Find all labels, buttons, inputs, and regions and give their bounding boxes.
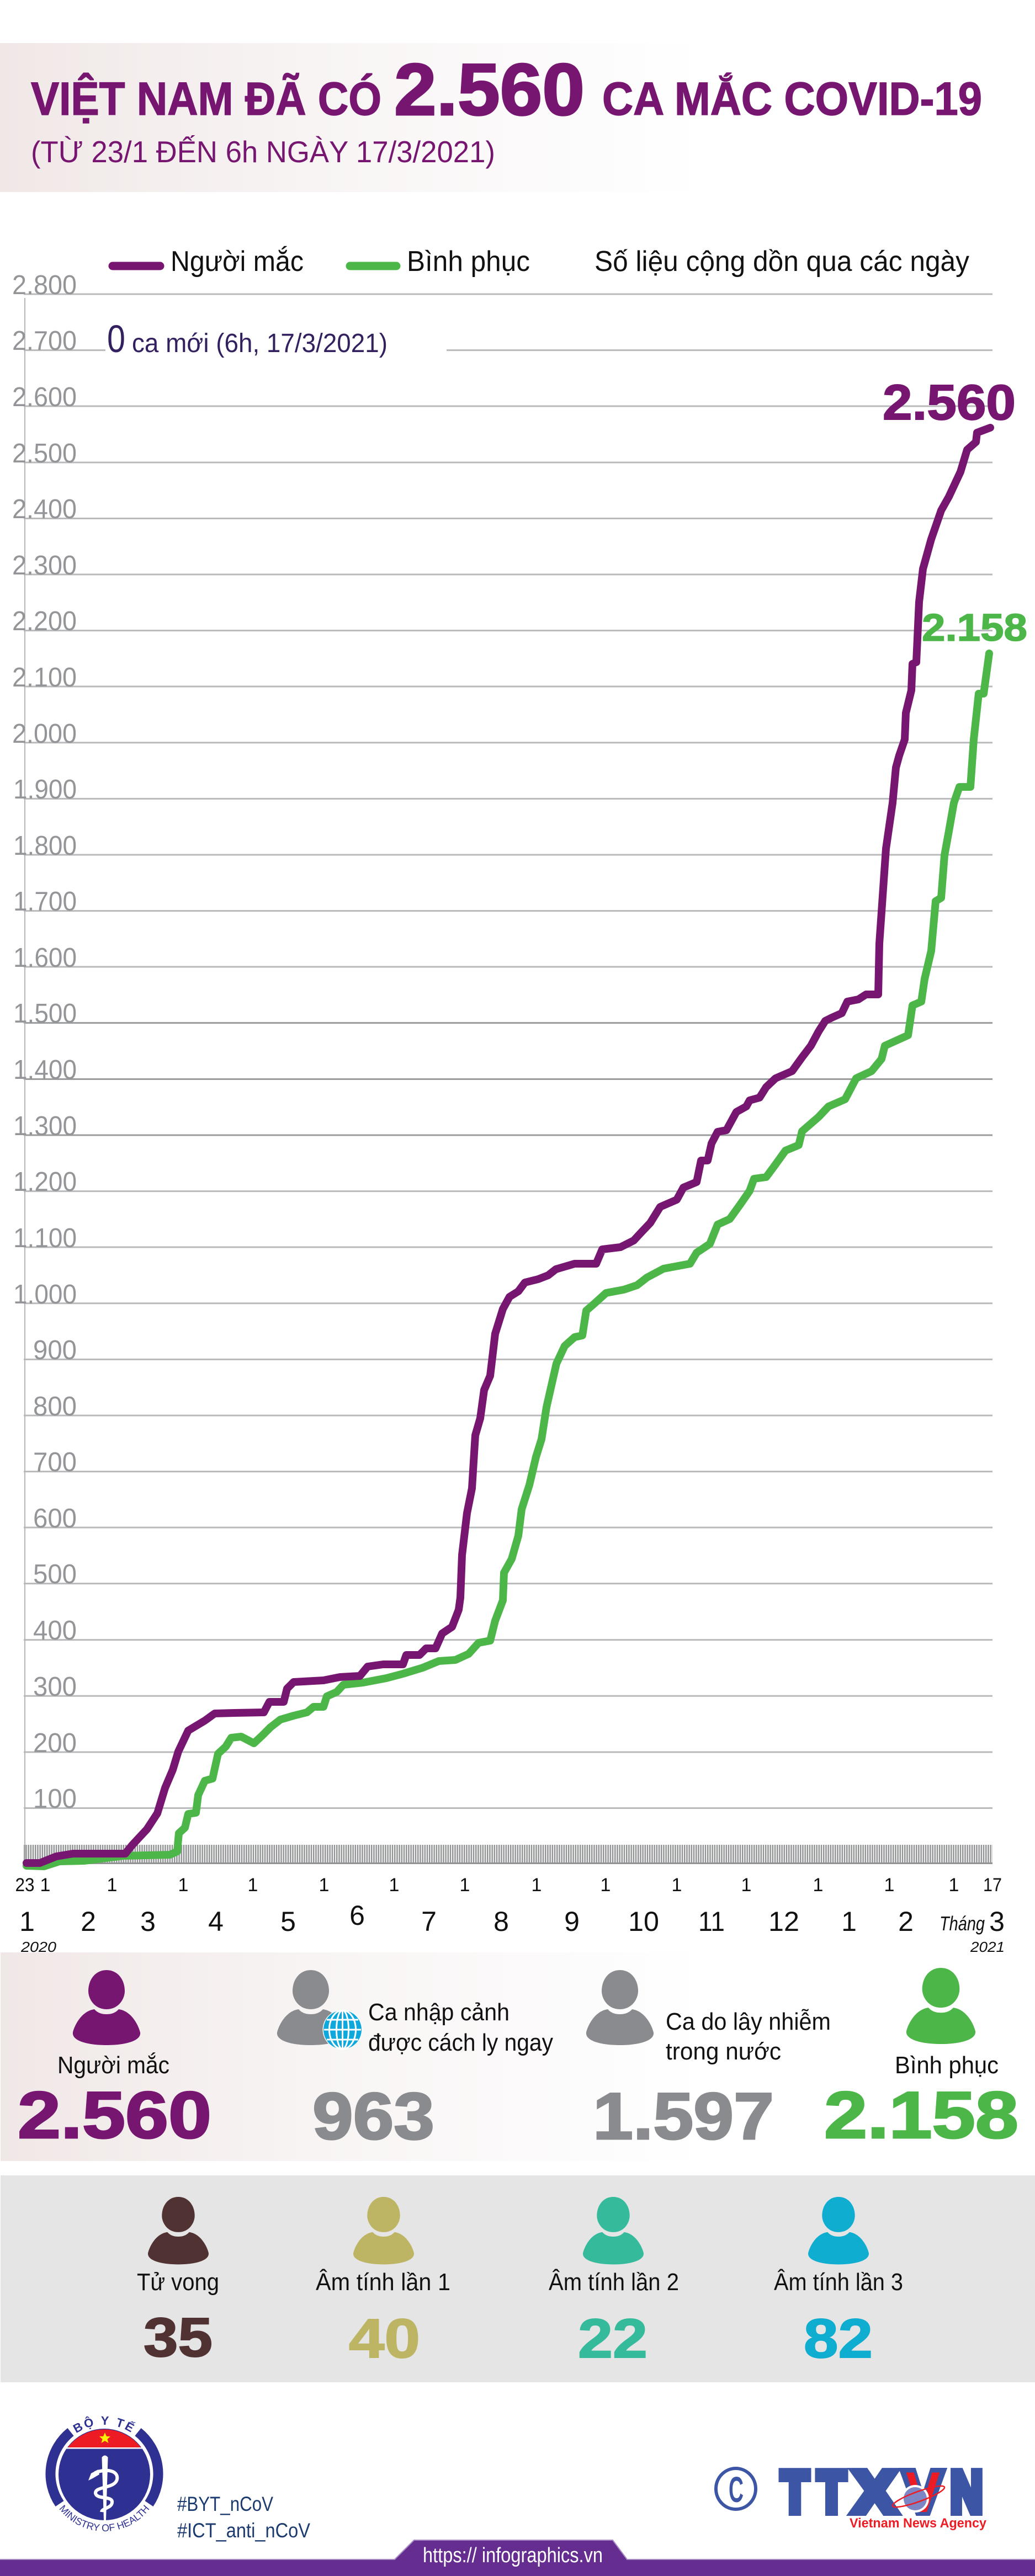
infected line	[26, 428, 990, 1863]
stat: ca nhập cảnh: Ca nhập cảnh	[368, 1999, 509, 2026]
x axis day ticks: 1	[672, 1875, 682, 1896]
stat: âm tính lần 1: Âm tính lần 1	[316, 2269, 450, 2296]
stat: ca nhập cảnh: được cách ly ngay	[368, 2029, 553, 2056]
logo: ministry of health	[45, 2416, 163, 2532]
logo: copyright mark	[716, 2468, 756, 2510]
line chart	[12, 270, 1027, 1955]
stat: bình phục: 2.158	[824, 2078, 1018, 2152]
y axis labels: 2.100	[12, 663, 77, 693]
x axis months: 2	[898, 1906, 914, 1937]
stat: ca nhập cảnh: 963	[312, 2079, 434, 2153]
y axis labels: 1.300	[13, 1111, 77, 1141]
y axis labels: 2.200	[12, 606, 77, 636]
stat: âm tính lần 3	[774, 2197, 903, 2370]
stat: bình phục	[824, 1968, 1018, 2152]
y axis labels: 200	[33, 1728, 77, 1758]
stat: người mắc: 2.560	[18, 2078, 211, 2152]
stat: tử vong: Tử vong	[137, 2269, 219, 2296]
y axis labels: 600	[33, 1504, 77, 1534]
stat: âm tính lần 2: Âm tính lần 2	[549, 2269, 679, 2296]
y axis labels: 900	[33, 1335, 77, 1365]
icon: globe	[322, 2010, 362, 2050]
logo: ttxvn: T	[818, 2460, 846, 2525]
y axis labels: 2.600	[12, 382, 77, 412]
x axis months: 7	[421, 1906, 437, 1937]
stat: ca lây nhiễm trong nước	[586, 1970, 831, 2153]
logo: ttxvn: X	[853, 2460, 896, 2525]
x axis day ticks: 1	[532, 1875, 542, 1896]
y axis labels: 2.400	[12, 494, 77, 524]
stat: âm tính lần 1	[316, 2197, 450, 2370]
stat: ca lây nhiễm trong nước: Ca do lây nhiễm	[666, 2008, 831, 2035]
y axis labels: 500	[33, 1560, 77, 1589]
new cases note	[107, 317, 388, 360]
x axis months: 3	[140, 1906, 156, 1937]
x axis months: 10	[628, 1906, 659, 1937]
hashtags: #BYT_nCoV	[177, 2493, 273, 2515]
x axis months: 2	[81, 1906, 96, 1937]
stat: người mắc: Người mắc	[57, 2052, 169, 2079]
y axis labels: 2.800	[12, 270, 77, 300]
stat: âm tính lần 3: Âm tính lần 3	[774, 2269, 903, 2296]
y axis labels: 1.700	[13, 887, 77, 917]
x axis day ticks: 1	[40, 1875, 50, 1896]
hatched date axis band	[24, 1845, 992, 1864]
year 2021: 2021	[970, 1939, 1005, 1955]
x axis day ticks: 1	[107, 1875, 117, 1896]
recovered line	[26, 653, 989, 1866]
x axis day ticks: 1	[319, 1875, 329, 1896]
footer bar	[0, 2540, 1035, 2576]
x axis months: 12	[768, 1906, 799, 1937]
x axis day ticks: 1	[178, 1875, 188, 1896]
header panel	[0, 43, 1035, 192]
x axis months: 1	[19, 1906, 35, 1937]
x axis months: 6	[349, 1900, 365, 1931]
x axis day ticks	[15, 1875, 1002, 1896]
x axis day ticks: 23	[15, 1875, 34, 1896]
title: VIỆT NAM ĐÃ CÓ	[31, 73, 381, 125]
value label: 2.560: 2.560	[883, 375, 1016, 430]
x axis months: 5	[280, 1906, 296, 1937]
y axis labels: 1.600	[13, 943, 77, 973]
x axis day ticks: 1	[884, 1875, 894, 1896]
source url: https:// infographics.vn	[423, 2544, 603, 2567]
subtitle: (TỪ 23/1 ĐẾN 6h NGÀY 17/3/2021)	[31, 135, 495, 169]
y axis labels: 1.500	[13, 999, 77, 1029]
title	[31, 49, 982, 131]
new cases note: ca mới (6h, 17/3/2021)	[132, 329, 388, 358]
logo: ministry of health: MINISTRY OF HEALTH	[60, 2505, 149, 2532]
hashtags: #ICT_anti_nCoV	[177, 2519, 310, 2542]
y axis labels: 2.500	[12, 439, 77, 469]
y axis labels: 300	[33, 1672, 77, 1702]
y axis labels: 400	[33, 1616, 77, 1646]
y axis labels: 800	[33, 1392, 77, 1422]
y axis labels: 2.700	[12, 326, 77, 356]
logo: ttxvn: N	[951, 2460, 983, 2525]
x axis day ticks: 1	[741, 1875, 751, 1896]
new cases note: 0	[107, 317, 125, 360]
y axis labels: 1.400	[13, 1055, 77, 1085]
stat: ca nhập cảnh	[277, 1970, 553, 2153]
y axis labels: 1.000	[13, 1280, 77, 1310]
y axis labels	[12, 270, 77, 1814]
hashtags	[177, 2493, 310, 2542]
y axis labels: 1.200	[13, 1167, 77, 1197]
stat: âm tính lần 1: 40	[349, 2308, 420, 2370]
logo: copyright mark: C	[729, 2469, 744, 2510]
stat: bình phục: Bình phục	[895, 2052, 999, 2079]
title: CA MẮC COVID-19	[602, 73, 982, 125]
x axis day ticks: 1	[460, 1875, 470, 1896]
panel: secondary totals	[1, 2175, 1035, 2382]
y axis labels: 1.100	[13, 1223, 77, 1253]
logo: ttxvn	[781, 2460, 987, 2531]
y axis labels: 100	[33, 1784, 77, 1814]
x axis months: 4	[208, 1906, 224, 1937]
title: 2.560	[394, 49, 585, 131]
x axis day ticks: 1	[949, 1875, 959, 1896]
stat: tử vong: 35	[144, 2307, 213, 2369]
x axis day ticks: 17	[983, 1875, 1002, 1896]
logo: ministry of health: BỘ Y TẾ	[73, 2416, 136, 2433]
x axis months: 9	[564, 1906, 580, 1937]
logo: ttxvn: T	[781, 2460, 809, 2525]
stat: ca lây nhiễm trong nước: 1.597	[593, 2079, 774, 2153]
x axis months: 3	[989, 1906, 1005, 1937]
legend	[113, 246, 969, 278]
logo: ttxvn: Vietnam News Agency	[850, 2516, 987, 2531]
legend: người mắc: Người mắc	[171, 246, 304, 278]
stat: tử vong	[137, 2197, 219, 2369]
stat: ca lây nhiễm trong nước: trong nước	[666, 2038, 781, 2065]
y axis labels: 2.000	[12, 719, 77, 749]
y axis labels: 700	[33, 1447, 77, 1477]
x axis day ticks: 1	[389, 1875, 399, 1896]
x axis months: 8	[493, 1906, 509, 1937]
logo: ttxvn: V	[906, 2461, 940, 2525]
chart note: Số liệu cộng dồn qua các ngày	[595, 246, 969, 278]
y axis labels: 1.800	[13, 831, 77, 861]
value label: 2.158: 2.158	[922, 606, 1027, 649]
x axis months	[19, 1900, 1005, 1937]
x axis day ticks: 1	[248, 1875, 258, 1896]
y axis labels: 1.900	[13, 775, 77, 805]
stat: âm tính lần 3: 82	[804, 2308, 873, 2370]
x axis months: 1	[841, 1906, 857, 1937]
stat: người mắc	[18, 1970, 211, 2152]
stat: âm tính lần 2	[549, 2197, 679, 2370]
panel: main totals	[1, 1952, 1035, 2161]
stat: âm tính lần 2: 22	[578, 2308, 647, 2370]
month axis caption: Tháng	[940, 1912, 985, 1935]
x axis day ticks: 1	[813, 1875, 823, 1896]
logo: ttxvn: V	[904, 2460, 942, 2525]
year 2020: 2020	[20, 1939, 57, 1955]
x axis months: 11	[698, 1906, 725, 1937]
y axis labels: 2.300	[12, 551, 77, 581]
x axis day ticks: 1	[601, 1875, 611, 1896]
legend: bình phục: Bình phục	[407, 246, 530, 278]
